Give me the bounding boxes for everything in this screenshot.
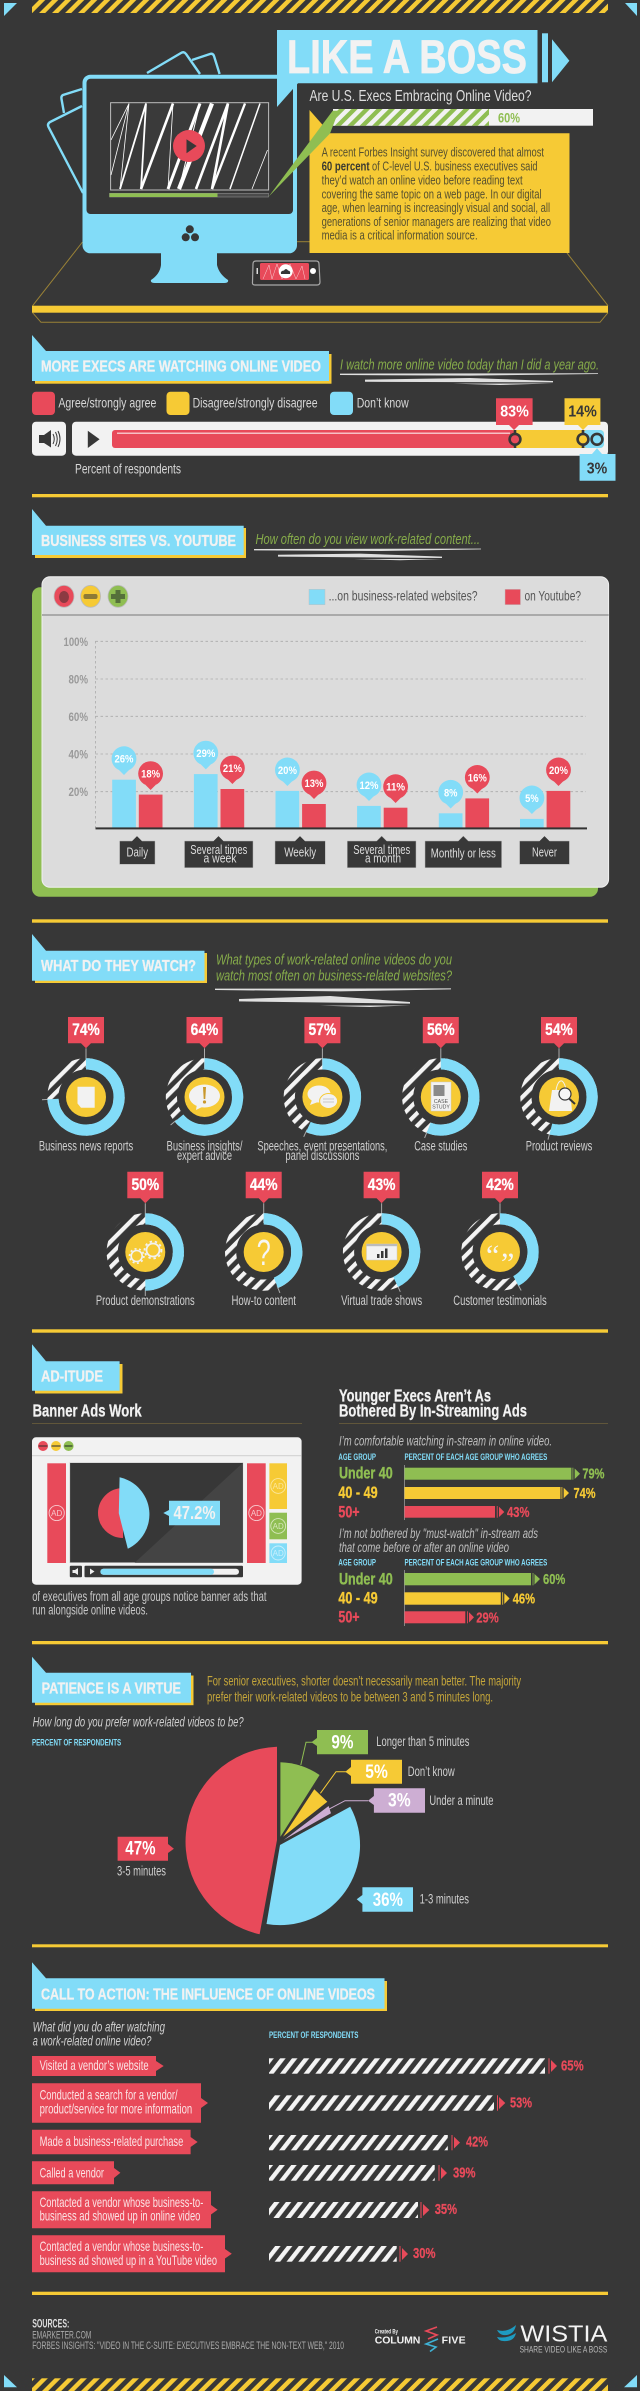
category labels: Several times [353,842,411,857]
y axis labels [64,635,88,799]
heading: call to action [32,1962,387,2011]
question: how often: How often do you view work-related content... [256,531,480,548]
row: visited a vendor's website [32,2056,584,2076]
chart: not bothered by must-watch: AGE GROUP [338,1558,376,1569]
corner triangle bottom left [4,2375,17,2387]
question: what did you do: What did you do after watching [33,2019,165,2035]
video player [70,1463,243,1563]
chart: not bothered by must-watch: 40 - 49 [338,1588,378,1607]
y axis labels: 60% [68,710,88,724]
row: contacted vendor online video: 35% [435,2201,457,2218]
donut: case studies: CASE [434,1099,449,1105]
pie chart [98,1477,149,1549]
video progress bar [110,193,268,197]
logo: wistia [497,2321,608,2355]
donut: business insights [166,1017,243,1163]
subheading: younger execs: Bothered By In-Streaming Ads [339,1401,527,1421]
category labels: a week [204,851,237,866]
callout: 14%: 14% [568,404,597,421]
question: what types [216,951,452,984]
heading: business sites [32,509,246,558]
row: called a vendor: 39% [453,2164,476,2181]
ads right: AD [273,1522,284,1531]
intro text box: A recent Forbes Insight survey discovered that almost [322,146,544,160]
text: patience description: prefer their work-related videos to be between 3 and 5 minutes long. [207,1688,493,1704]
chart: comfortable with in-stream: 74% [574,1485,596,1502]
chart: not bothered by must-watch: I’m not bothered by "must-watch" in-stream ads [339,1526,538,1541]
donut: business news reports: Business news reports [39,1138,133,1153]
row: called a vendor [32,2161,476,2184]
icon: speaker [32,422,66,456]
callout: 5% don't know [320,1760,455,1793]
bar chart: 5% [525,793,539,805]
bar chart: 20% [278,765,297,777]
category labels [120,836,569,868]
heading: what do they watch: WHAT DO THEY WATCH? [41,958,196,975]
row: made a purchase: Made a business-related purchase [40,2133,183,2149]
heading: ad-itude [32,1344,122,1394]
category labels: Daily [127,845,148,860]
callout: 3% under a minute [329,1788,494,1813]
intro text box: they’d watch an online video before reading text [322,173,523,187]
logo: column five: COLUMN [375,2334,420,2346]
icon: monitor [82,75,297,283]
heading: ad-itude: AD-ITUDE [41,1368,103,1385]
corner triangle top left [4,3,17,16]
sources: SOURCES: [32,2318,69,2330]
donut: business insights: Business insights/ [166,1138,243,1153]
axis caption: PERCENT OF RESPONDENTS [32,1737,121,1748]
ads right: AD [251,1509,262,1518]
donut: case studies [408,1017,474,1153]
question: what did you do: a work-related online video? [33,2033,152,2049]
callout: 9% longer than 5 minutes [301,1730,470,1765]
donut: how-to content: 44% [250,1175,278,1194]
logo: column five [375,2327,466,2352]
row: contacted vendor youtube: 30% [413,2245,436,2262]
pie chart: video length [186,1747,360,1934]
legend: agree [32,392,157,415]
row: made a purchase: 42% [466,2133,488,2150]
row: contacted vendor online video: Contacted a vendor whose business-to- [40,2194,204,2210]
60% progress bar [333,109,593,126]
category labels: Weekly [284,845,317,860]
callout: 83%: 83% [500,404,529,421]
bar chart [96,741,587,829]
ads right: AD [273,1482,284,1491]
row: contacted vendor youtube: business ad showed up in a YouTube video [40,2252,217,2268]
category labels: a month [365,851,401,866]
y axis labels: 100% [64,635,88,649]
bar chart: 21% [223,763,242,775]
callout: 9% longer than 5 minutes: Longer than 5 minutes [376,1734,470,1749]
category labels: Never [532,845,557,860]
subheading: younger execs: Younger Execs Aren’t As [339,1385,491,1405]
title: LIKE A BOSS [287,31,527,84]
row: contacted vendor youtube: Contacted a vendor whose business-to- [40,2238,204,2254]
callout: 5% don't know: Don’t know [408,1764,455,1779]
chart: not bothered by must-watch: 29% [476,1610,499,1627]
bar chart: 29% [196,748,215,760]
donut: customer testimonials: ” [501,1247,514,1280]
bar chart: 11% [386,782,405,794]
text: banner ads caption: run alongside online videos. [32,1602,148,1618]
donut: virtual trade shows: 43% [368,1175,395,1194]
logo: column five: Created By [375,2329,398,2335]
row: made a purchase [32,2130,488,2154]
bar chart: 20% [549,765,568,777]
heading: what do they watch [32,934,207,983]
ads right [247,1463,287,1563]
row: conducted a search: 53% [510,2094,532,2111]
browser with banner ads [32,1437,302,1585]
donut: virtual trade shows [341,1172,422,1308]
60% progress bar: 60% [498,109,520,125]
text: patience description [207,1673,521,1704]
heading: more execs [32,335,332,384]
donut: case studies: 56% [427,1020,455,1039]
y axis labels: 80% [68,672,88,686]
donut: speeches [257,1017,387,1163]
callout: 14% [564,398,600,430]
legend: agree: Agree/strongly agree [58,394,157,410]
icon: play button [173,130,205,162]
donut: how-to content [231,1172,297,1308]
intro text box: media is a critical information source. [322,229,478,243]
donut: customer testimonials: 42% [486,1175,514,1194]
player controls [70,1566,243,1577]
chart: not bothered by must-watch [338,1526,565,1627]
row: conducted a search: product/service for more information [40,2100,192,2116]
heading: more execs: MORE EXECS ARE WATCHING ONLINE VIDEO [41,358,321,375]
sources: EMARKETER.COM [32,2329,91,2341]
panel: browser chart [32,577,609,897]
callout: 3% under a minute: Under a minute [429,1793,494,1808]
intro text box: of C-level U.S. business executives said [372,160,538,174]
intro text box [269,110,570,253]
video-style progress player [72,422,608,456]
bar chart: 26% [114,754,134,766]
bar chart: 18% [141,769,160,781]
icon: window buttons [54,585,128,607]
sources [32,2318,344,2352]
chart: comfortable with in-stream: 79% [582,1465,604,1482]
donut: how-to content: ? [257,1232,271,1273]
callout: 47% 3-5 minutes: 47% [125,1839,156,1860]
subheading: younger execs [339,1385,527,1421]
donut: virtual trade shows: Virtual trade shows [341,1293,422,1308]
icon: papers behind monitor [48,52,220,193]
category labels: Monthly or less [431,846,496,861]
donut: speeches: Speeches, event presentations, [257,1138,387,1153]
row: called a vendor: Called a vendor [40,2164,104,2180]
chart: not bothered by must-watch: Under 40 [339,1569,393,1588]
bottom hazard stripe [32,2378,608,2391]
donut: speeches: panel discussions [285,1148,360,1163]
subtitle: Are U.S. Execs Embracing Online Video? [310,88,532,105]
heading: patience is a virtue: PATIENCE IS A VIRTUE [42,1680,181,1697]
donut: case studies: STUDY [432,1104,450,1110]
donut: business insights: expert advice [177,1148,232,1163]
heading: call to action: CALL TO ACTION: THE INFLUENCE OF ONLINE VIDEOS [41,1986,375,2003]
donut: speeches: 57% [309,1020,336,1039]
title banner [277,30,538,107]
legend: disagree: Disagree/strongly disagree [193,394,318,410]
heading: patience is a virtue [32,1657,194,1705]
callout: 47% 3-5 minutes: 3-5 minutes [117,1863,166,1878]
callout: 9% longer than 5 minutes: 9% [331,1732,354,1753]
legend: don't know: Don’t know [357,394,409,410]
donut: product demonstrations: 50% [131,1175,159,1194]
row: conducted a search: Conducted a search for a vendor/ [40,2086,178,2102]
row: conducted a search [32,2083,532,2123]
chart: comfortable with in-stream: AGE GROUP [338,1452,376,1463]
callout: 5% don't know: 5% [365,1762,388,1783]
chart: not bothered by must-watch: 46% [513,1590,535,1608]
donut: case studies: Case studies [414,1138,467,1153]
icon: phone [252,261,320,285]
question: how long: How long do you prefer work-related videos to be? [33,1715,244,1730]
top hazard stripe [32,0,608,13]
text: banner ads caption [32,1588,267,1618]
chart: comfortable with in-stream: 43% [507,1504,529,1521]
row: contacted vendor online video [32,2191,457,2228]
callout: 36% 1-3 minutes: 1-3 minutes [420,1892,469,1907]
donut: customer testimonials [453,1172,547,1308]
legend: disagree [166,392,318,415]
axis caption: PERCENT OF RESPONDENTS [269,2030,358,2041]
callout: 3%: 3% [587,460,607,477]
chart: not bothered by must-watch: that come before or after an online video [339,1540,509,1555]
row: contacted vendor online video: business ad showed up in online video [40,2208,201,2224]
callout: 47.2% [163,1501,220,1525]
heading: business sites: BUSINESS SITES VS. YOUTUBE [41,533,236,550]
ads right: AD [273,1549,284,1558]
donut: business insights: 64% [191,1020,218,1039]
desk [32,242,608,322]
chart: not bothered by must-watch: 60% [543,1571,565,1588]
bar chart: 13% [304,778,324,790]
donut: customer testimonials: “ [486,1239,499,1272]
bar chart: 8% [444,787,458,799]
question: what types: watch most often on business-related websites? [216,967,452,984]
intro text box: 60 percent [322,160,370,174]
legend: youtube [505,588,581,605]
callout: 3% [580,448,616,481]
intro text box: age, when learning is increasingly visual and social, all [322,201,550,215]
callout: 36% 1-3 minutes: 36% [373,1890,403,1911]
bar chart: 16% [468,772,487,784]
y axis labels: 40% [68,748,88,762]
ad left [47,1463,66,1563]
bar chart: 12% [360,780,379,792]
chart: comfortable with in-stream: Under 40 [339,1464,393,1483]
donut: product demonstrations [96,1172,195,1308]
callout: 36% 1-3 minutes [357,1887,469,1912]
subheading: banner ads work: Banner Ads Work [33,1401,142,1421]
chart: comfortable with in-stream: 40 - 49 [338,1483,378,1502]
chart: not bothered by must-watch: 50+ [338,1608,360,1627]
corner triangle top right [625,3,637,16]
legend: business websites: ...on business-related websites? [329,588,478,604]
text: banner ads caption: of executives from all age groups notice banner ads that [32,1588,267,1604]
video frame [111,103,269,190]
intro text box: generations of senior managers are realizing that video [322,215,551,229]
donut: customer testimonials: Customer testimonials [453,1293,547,1308]
callout: 3% under a minute: 3% [388,1791,411,1812]
donut: product reviews [526,1017,592,1153]
row: visited a vendor's website: 65% [561,2057,584,2074]
row: contacted vendor youtube [32,2235,436,2272]
chart: comfortable with in-stream: I’m comfortable watching in-stream in online video. [339,1433,552,1448]
row: visited a vendor's website: Visited a vendor’s website [40,2057,149,2073]
callout: 47% 3-5 minutes [117,1837,174,1878]
caption: percent of respondents: Percent of respondents [75,460,181,476]
donut: product reviews: Product reviews [526,1138,592,1153]
question: what types: What types of work-related online videos do you [216,951,452,968]
callout: 47.2%: 47.2% [174,1503,216,1523]
chart: comfortable with in-stream: PERCENT OF EACH AGE GROUP WHO AGREES [404,1452,547,1463]
chart: comfortable with in-stream: 50+ [338,1502,360,1521]
donut: product demonstrations: Product demonstrations [96,1293,195,1308]
question: what did you do [33,2019,165,2049]
y axis labels: 20% [68,785,88,799]
donut: business news reports [39,1017,133,1153]
logo: wistia: WISTIA [520,2321,608,2347]
donut: business news reports: 74% [72,1020,100,1039]
icon: logo dots [182,225,199,241]
donut: product reviews: 54% [545,1020,573,1039]
legend: business websites [309,588,478,605]
chart: comfortable with in-stream [338,1433,604,1521]
category labels: Several times [190,842,248,857]
legend: don't know [330,392,409,415]
legend: youtube: on Youtube? [524,588,581,604]
intro text box: covering the same topic on a web page. In our digital [322,187,542,201]
callout: 83% [496,398,533,430]
corner triangle bottom right [624,2375,637,2387]
sources: FORBES INSIGHTS: "VIDEO IN THE C-SUITE: EXECUTIVES EMBRACE THE NON-TEXT WEB," 2010 [32,2340,344,2352]
icon: title arrow [542,33,569,82]
logo: column five: FIVE [442,2334,466,2346]
donut: how-to content: How-to content [231,1293,296,1308]
ad left: AD [51,1509,62,1518]
chart: not bothered by must-watch: PERCENT OF EACH AGE GROUP WHO AGREES [404,1558,547,1569]
